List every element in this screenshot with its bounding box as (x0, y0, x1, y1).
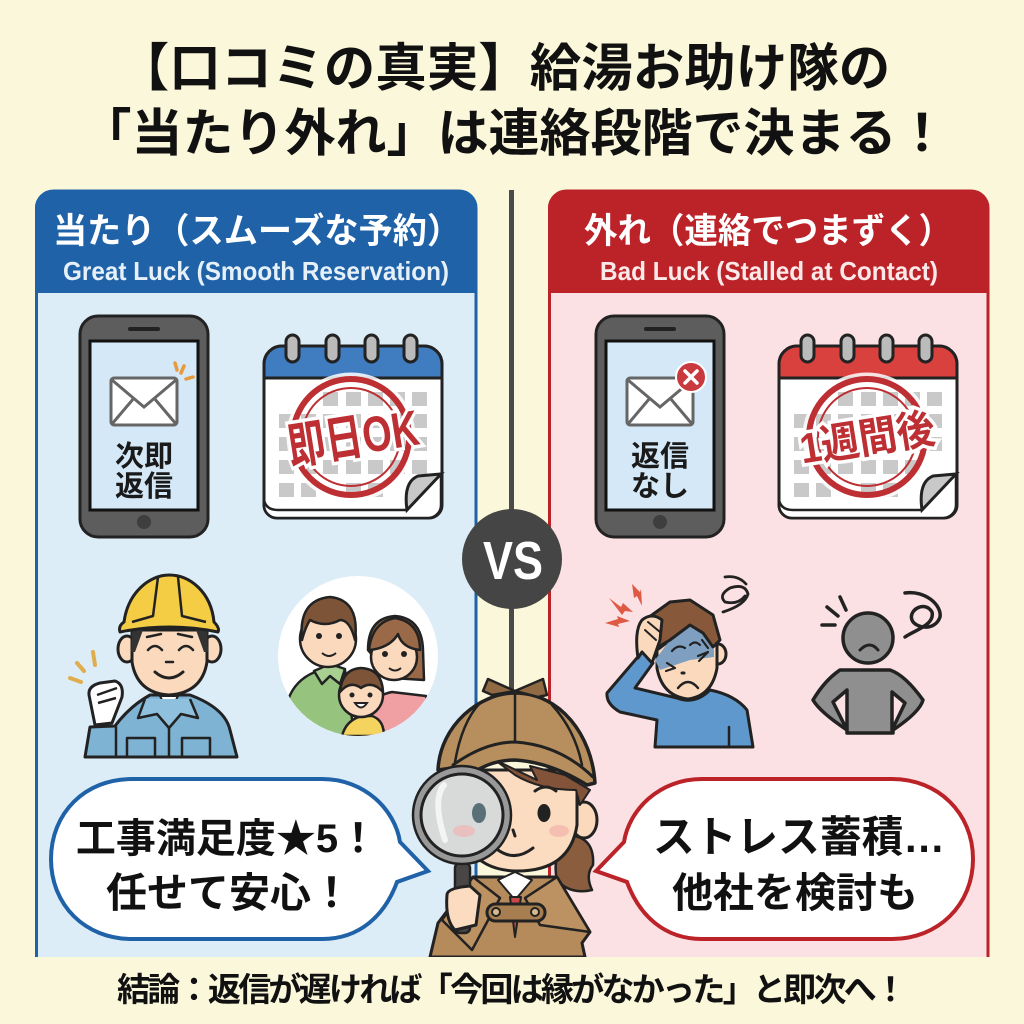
calendar: same day OK (264, 335, 442, 518)
title: 【口コミの真実】給湯お助け隊の (118, 39, 890, 97)
worker (70, 575, 237, 757)
VS badge: VS (483, 531, 543, 591)
family illustration (278, 576, 440, 740)
calendar: one week later: 1週間後 (796, 405, 938, 472)
VS badge (462, 509, 562, 609)
panel header: good luck: Great Luck (Smooth Reservation) (63, 256, 449, 286)
title: 「当たり外れ」は連絡段階で決まる！ (80, 105, 948, 162)
calendar: one week later (779, 335, 957, 518)
phone: no reply (596, 316, 724, 537)
detective character (413, 679, 597, 957)
panel header: bad luck: Bad Luck (Stalled at Contact) (600, 256, 938, 286)
center divider (509, 190, 514, 700)
calendar: same day OK: 即日OK (284, 400, 423, 476)
stressed man (605, 577, 753, 747)
speech bubble: bad: 他社を検討も (672, 870, 918, 916)
panel header: good luck: 当たり（スムーズな予約） (53, 211, 461, 251)
phone: instant reply: 次即 (115, 440, 173, 473)
panel: bad luck (548, 190, 989, 970)
phone: no reply: 返信 (631, 440, 689, 473)
phone: no reply: なし (631, 471, 689, 503)
grey customer silhouette (813, 593, 940, 733)
title (80, 39, 948, 162)
speech bubble: good (51, 779, 428, 939)
panel header: bad luck: 外れ（連絡でつまずく） (584, 212, 952, 251)
phone: instant reply: 返信 (115, 470, 173, 503)
conclusion: 結論：返信が遅ければ「今回は縁がなかった」と即次へ！ (117, 971, 907, 1008)
panel header: bad luck (548, 190, 989, 293)
phone: instant reply (80, 316, 208, 537)
panel header: good luck (35, 190, 477, 293)
speech bubble: bad (596, 779, 973, 939)
panel: good luck (35, 190, 477, 970)
speech bubble: good: 工事満足度★5！ (76, 817, 378, 861)
speech bubble: bad: ストレス蓄積… (653, 814, 945, 862)
speech bubble: good: 任せて安心！ (106, 870, 352, 916)
